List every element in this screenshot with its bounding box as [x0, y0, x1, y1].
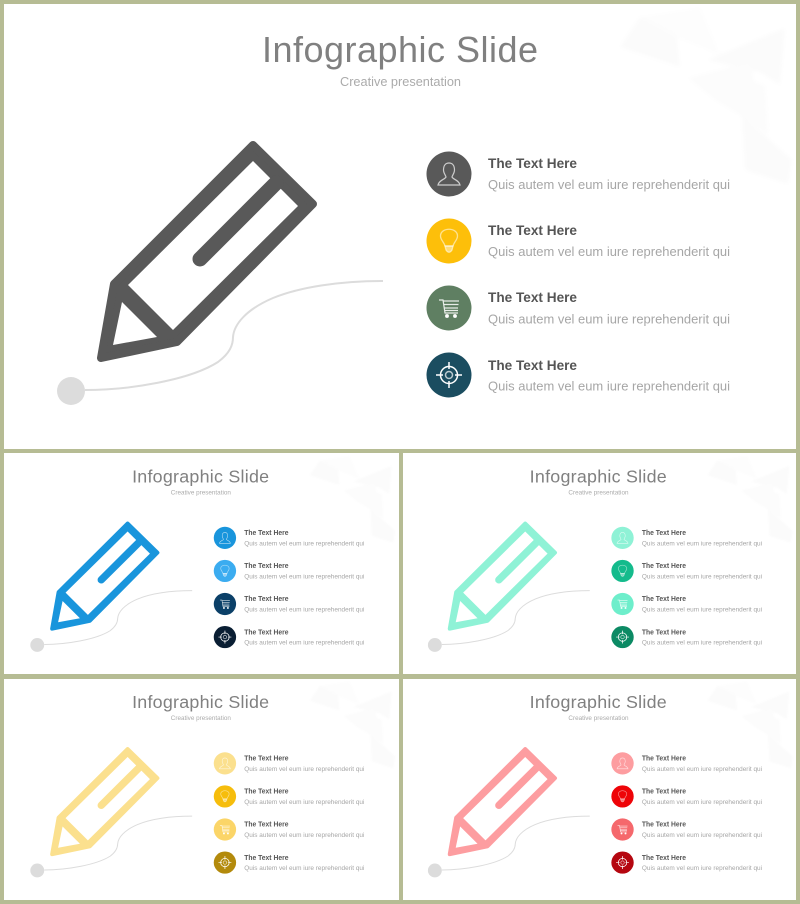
list item 3: Quis autem vel eum iure reprehenderit qui	[642, 832, 762, 839]
list item 1	[611, 527, 762, 549]
list item 1: Quis autem vel eum iure reprehenderit qui	[244, 540, 364, 547]
background polygons	[310, 456, 395, 543]
list item 1: Quis autem vel eum iure reprehenderit qui	[488, 177, 730, 192]
icon: pencil	[101, 145, 313, 358]
list item 2	[426, 218, 730, 264]
background polygons	[707, 681, 793, 768]
background polygons	[620, 8, 792, 184]
background polygons	[310, 681, 395, 768]
curve with dot	[30, 591, 192, 652]
list item 2	[214, 785, 364, 808]
subtitle: Creative presentation	[171, 715, 231, 722]
list item 1: The Text Here	[488, 155, 577, 171]
list item 1: The Text Here	[244, 755, 289, 762]
curve with dot	[30, 816, 192, 877]
list item 4: Quis autem vel eum iure reprehenderit qui	[244, 640, 364, 647]
title: Infographic Slide	[530, 692, 667, 712]
list item 2	[214, 560, 364, 582]
list item 4	[611, 851, 762, 874]
subtitle: Creative presentation	[171, 489, 231, 496]
list item 3: The Text Here	[244, 822, 289, 829]
list item 3: Quis autem vel eum iure reprehenderit qui	[642, 607, 762, 614]
list item 2: The Text Here	[488, 222, 577, 238]
list item 3: The Text Here	[488, 289, 577, 305]
list item 4	[214, 851, 364, 874]
list item 1: Quis autem vel eum iure reprehenderit qui	[642, 766, 762, 773]
list item 3: The Text Here	[642, 822, 686, 829]
list item 4: Quis autem vel eum iure reprehenderit qui	[642, 640, 762, 647]
title: Infographic Slide	[530, 467, 667, 487]
curve with dot	[428, 591, 590, 652]
list item 1: Quis autem vel eum iure reprehenderit qui	[642, 540, 762, 547]
list item 3: Quis autem vel eum iure reprehenderit qui	[244, 607, 364, 614]
title: Infographic Slide	[132, 467, 269, 487]
list item 1: The Text Here	[642, 530, 686, 537]
list item 4: Quis autem vel eum iure reprehenderit qui	[642, 865, 762, 872]
panel: blue slide	[4, 453, 399, 674]
list item 1	[426, 152, 730, 196]
list item 4: The Text Here	[244, 630, 289, 637]
curve with dot	[57, 281, 383, 405]
panel: red slide	[403, 679, 796, 900]
title: Infographic Slide	[262, 29, 538, 70]
list item 1	[611, 752, 762, 774]
list item 2: The Text Here	[244, 788, 289, 795]
list item 3	[214, 818, 364, 841]
list item 2: Quis autem vel eum iure reprehenderit qui	[642, 573, 762, 580]
panel: teal slide	[403, 453, 796, 674]
list item 2: The Text Here	[642, 563, 686, 570]
list item 4	[426, 352, 730, 398]
icon: pencil	[52, 524, 157, 629]
list item 1: Quis autem vel eum iure reprehenderit qui	[244, 766, 364, 773]
list item 1: The Text Here	[642, 755, 686, 762]
list item 4: The Text Here	[488, 357, 577, 373]
subtitle: Creative presentation	[568, 489, 629, 496]
title: Infographic Slide	[132, 692, 269, 712]
panel: main dark slide	[4, 4, 796, 449]
list item 2: Quis autem vel eum iure reprehenderit qui	[244, 799, 364, 806]
icon: pencil	[52, 749, 157, 854]
list item 3	[214, 593, 364, 615]
icon: pencil	[450, 749, 555, 854]
list item 2: Quis autem vel eum iure reprehenderit qui	[244, 573, 364, 580]
list item 4: The Text Here	[642, 855, 686, 862]
list item 3: Quis autem vel eum iure reprehenderit qui	[488, 312, 730, 326]
list item 2: The Text Here	[244, 563, 289, 570]
subtitle: Creative presentation	[568, 715, 629, 722]
list item 4: Quis autem vel eum iure reprehenderit qui	[488, 378, 730, 394]
list item 3: The Text Here	[642, 596, 686, 603]
list item 3: Quis autem vel eum iure reprehenderit qui	[244, 832, 364, 839]
icon: pencil	[450, 524, 555, 629]
list item 1	[214, 752, 364, 774]
list item 4: Quis autem vel eum iure reprehenderit qui	[244, 865, 364, 872]
list item 2	[611, 560, 762, 582]
list item 2: The Text Here	[642, 788, 686, 795]
list item 4	[214, 626, 364, 648]
list item 4	[611, 626, 762, 648]
list item 1: The Text Here	[244, 530, 289, 537]
subtitle: Creative presentation	[340, 74, 461, 89]
background polygons	[707, 456, 793, 543]
list item 4: The Text Here	[244, 855, 289, 862]
list item 2	[611, 785, 762, 808]
curve with dot	[428, 816, 590, 877]
list item 2: Quis autem vel eum iure reprehenderit qui	[488, 244, 730, 259]
list item 3: The Text Here	[244, 596, 289, 603]
panel: yellow slide	[4, 679, 399, 900]
list item 4: The Text Here	[642, 630, 686, 637]
list item 3	[426, 286, 730, 330]
list item 3	[611, 593, 762, 615]
list item 1	[214, 527, 364, 549]
list item 2: Quis autem vel eum iure reprehenderit qui	[642, 799, 762, 806]
list item 3	[611, 818, 762, 841]
